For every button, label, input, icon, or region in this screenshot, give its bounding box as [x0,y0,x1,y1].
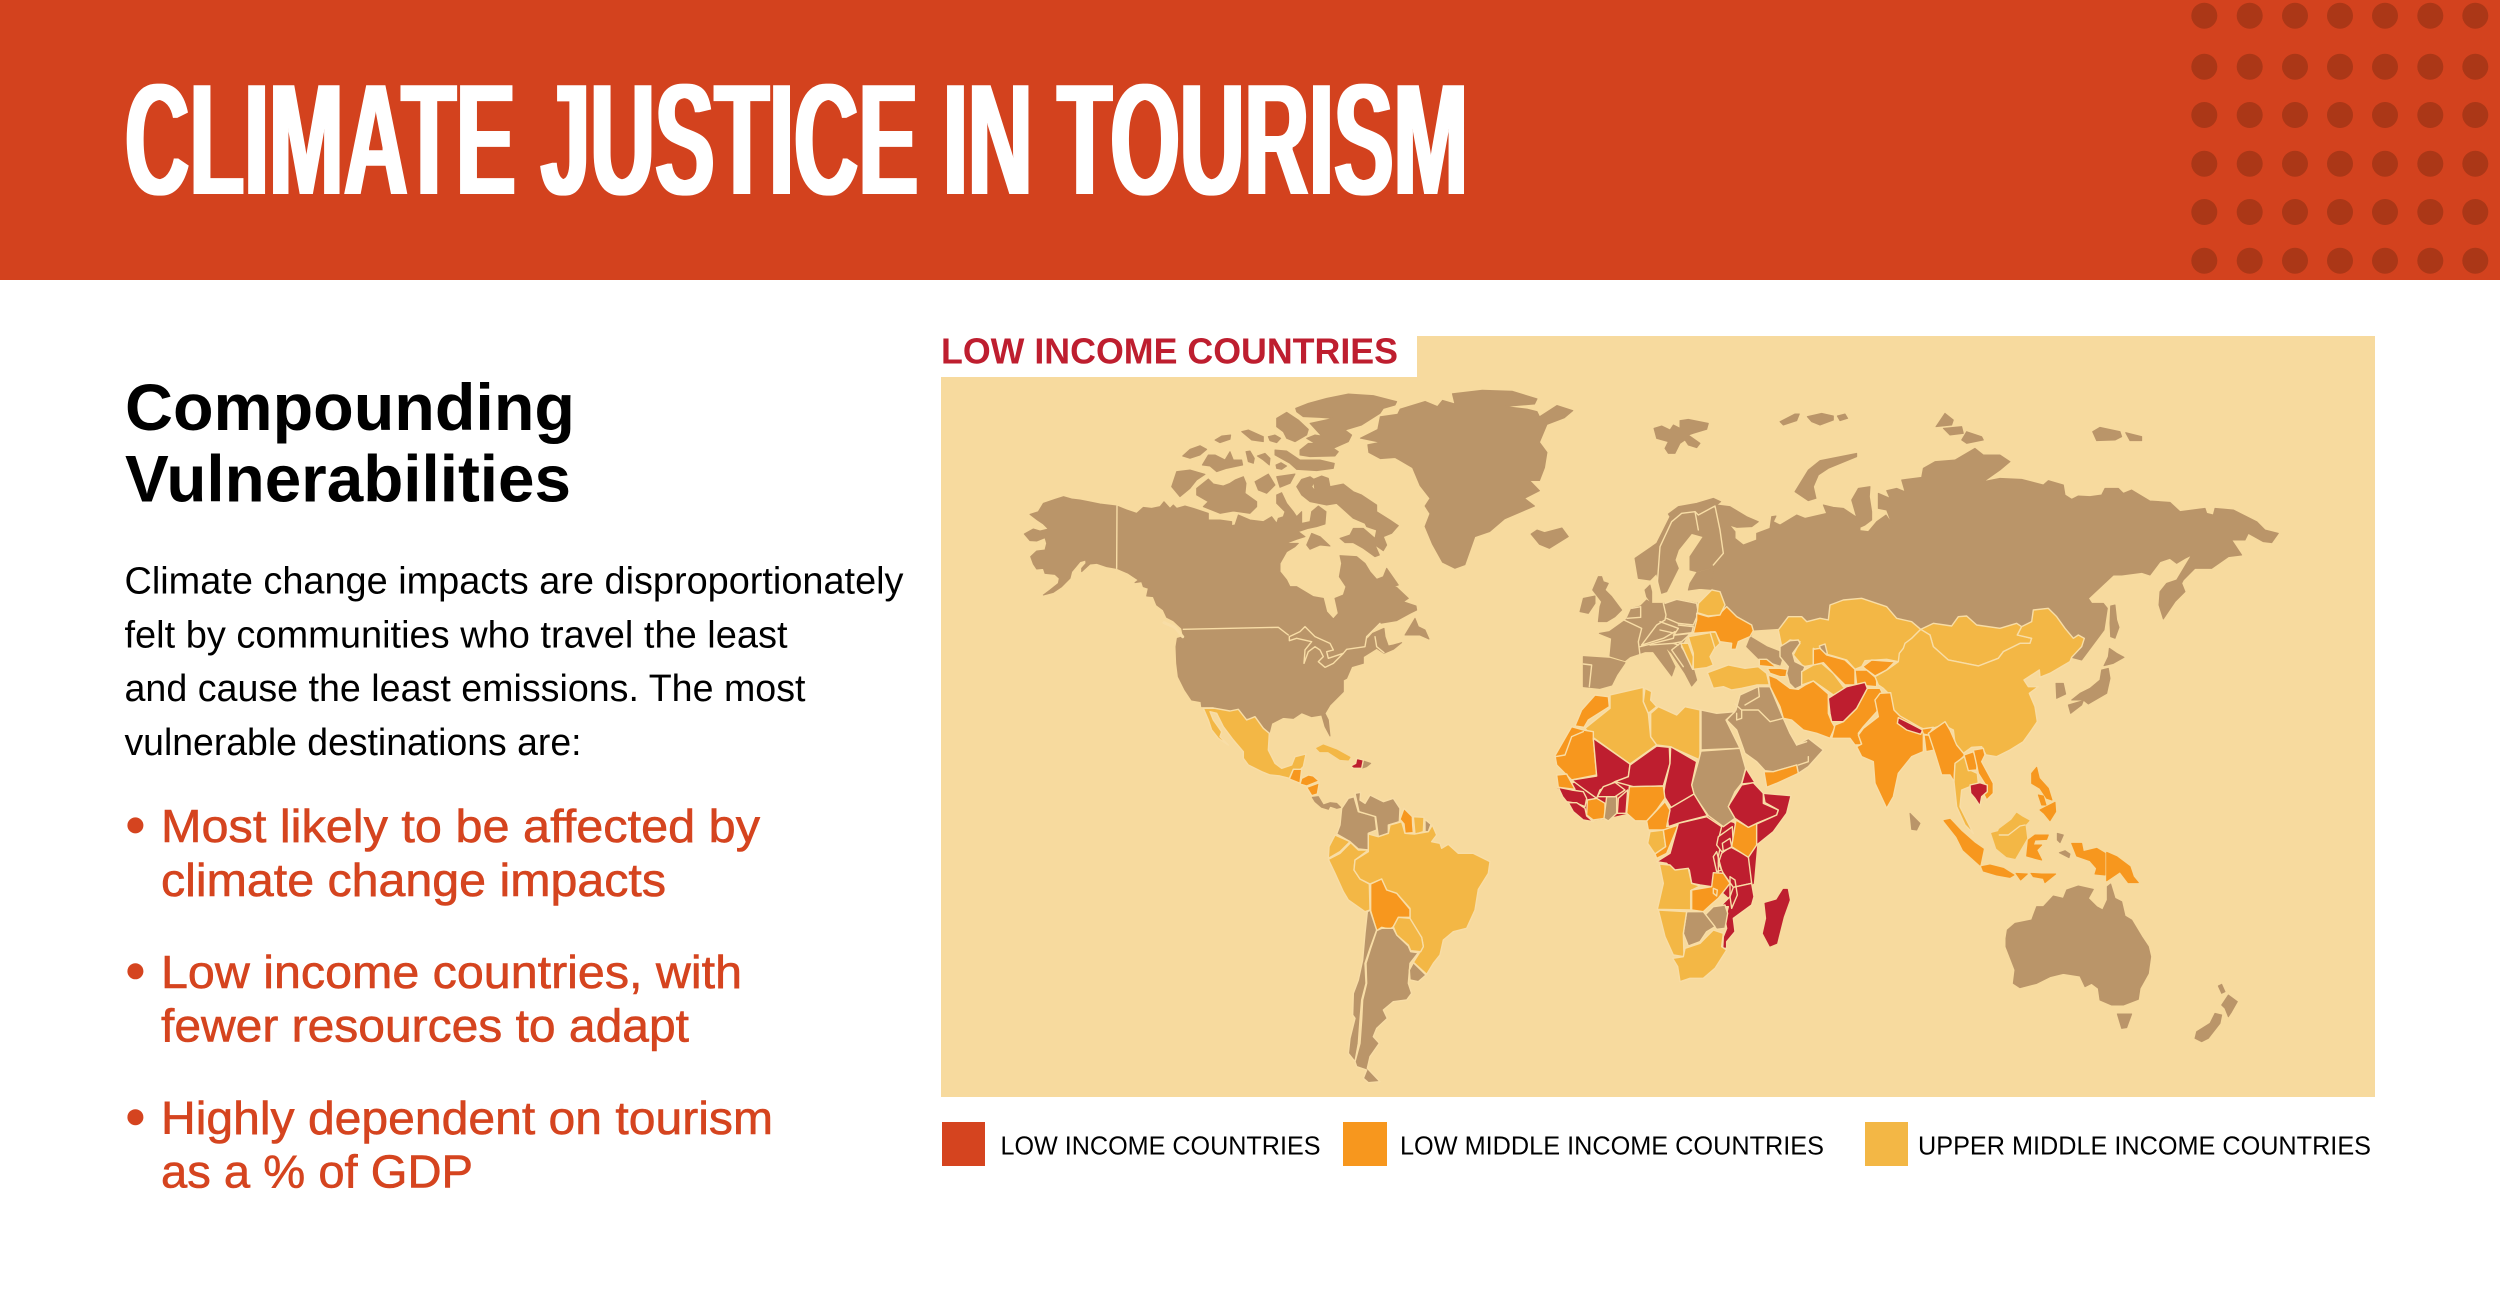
region: africa, middle east, south asia [1555,675,1993,982]
legend item: upper middle income: UPPER MIDDLE INCOME COUNTRIES [1918,1133,2371,1161]
panel: world map [941,331,2375,1097]
region: central and south america [1203,708,1490,1083]
middle east [1727,675,1835,787]
west and central africa [1555,727,1722,887]
tasmania and new zealand [2117,984,2237,1042]
heading: compounding vulnerabilities: Compounding [125,370,575,444]
bullet: most likely affected: climate change impacts [161,854,666,906]
body text: vulnerable destinations are: [124,722,582,764]
bullet: low income countries [127,946,742,1052]
body text: felt by communities who travel the least [124,614,788,656]
map title tab: LOW INCOME COUNTRIES [941,331,1398,372]
legend item: low middle income: LOW MIDDLE INCOME COUNTRIES [1400,1133,1824,1161]
bullet: dependent on tourism: as a % of GDP [161,1146,473,1198]
region: greenland and iceland [1360,390,1573,568]
bullet: most likely affected [127,800,760,906]
eastern europe and caucasus [1681,590,1787,690]
southern africa [1657,864,1789,982]
africa red underlay [1558,777,1757,898]
region: north america [1024,394,1429,736]
mongolia and china [1875,608,2084,757]
bullet: dependent on tourism: Highly dependent on tourism [161,1092,773,1144]
title: CLIMATE JUSTICE IN TOURISM [125,50,1468,230]
southeast asia mainland [1928,722,1993,833]
body text: and cause the least emissions. The most [124,668,806,710]
japan, sakhalin, korea [2056,605,2124,713]
arctic islands [1172,394,1429,639]
legend item: low income: LOW INCOME COUNTRIES [1000,1133,1320,1161]
western and central europe [1580,567,1717,688]
bullet: low income countries: fewer resources to adapt [161,1000,689,1052]
legend [942,1122,2371,1166]
legend item: upper middle income [1865,1122,2371,1166]
body text: Climate change impacts are disproportionately [124,561,904,603]
header band [0,0,2500,280]
bullet list [127,800,773,1198]
heading: compounding vulnerabilities [125,370,575,516]
body text [124,561,904,764]
region: maritime asia and oceania [1910,767,2237,1042]
legend item: low income [942,1122,1320,1166]
bullet: most likely affected: Most likely to be affected by [161,800,760,852]
australia [2006,884,2151,1005]
north africa [1575,687,1746,827]
decorative dot grid [2191,3,2488,274]
heading: compounding vulnerabilities: Vulnerabilities [125,442,571,516]
east africa [1713,768,1791,887]
bullet: low income countries: Low income countries, with [161,946,742,998]
south asia [1828,682,1938,808]
region: europe and northern asia [1580,413,2278,757]
arctic russia islands [1654,413,2142,501]
bullet: dependent on tourism [127,1092,773,1198]
legend item: low middle income [1343,1122,1824,1166]
scandinavia borders [1657,506,1723,583]
canada borders and great lakes [1117,506,1384,667]
central asia [1778,598,1921,695]
